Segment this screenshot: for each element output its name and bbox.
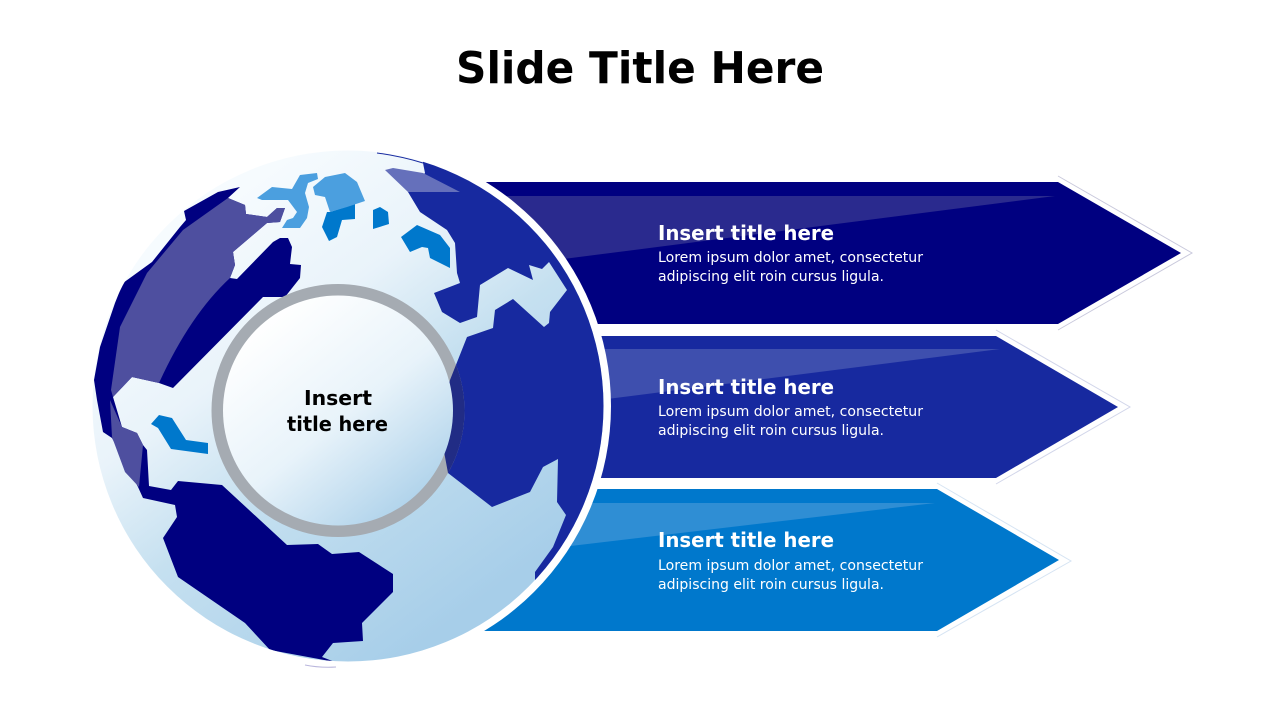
text block 1: Insert title here <box>658 221 834 245</box>
continent: Eurasia and Africa <box>408 162 604 580</box>
island: arctic dark <box>322 204 355 241</box>
highlight: upper continent <box>111 198 285 397</box>
island: north east <box>401 225 450 268</box>
text block 1: Lorem ipsum dolor amet, consectetur <box>658 250 923 266</box>
island: arctic left <box>257 173 318 228</box>
text block 3 <box>658 528 923 593</box>
continent: Americas <box>94 187 393 662</box>
text block 2: adipiscing elit roin cursus ligula. <box>658 423 884 439</box>
text block 3: Lorem ipsum dolor amet, consectetur <box>658 558 923 574</box>
arrow 1: navy <box>400 176 1192 330</box>
title: Slide Title Here <box>456 43 824 94</box>
highlight: north <box>385 168 460 192</box>
text block 2 <box>658 375 923 439</box>
highlight: lower continent <box>110 400 143 487</box>
text block 2: Lorem ipsum dolor amet, consectetur <box>658 404 923 420</box>
top edge line <box>377 153 423 163</box>
island: arctic light <box>313 173 365 212</box>
text block 1 <box>658 221 923 285</box>
center label <box>287 386 388 436</box>
island: caribbean <box>151 415 208 454</box>
arrow 2: royal blue <box>400 330 1130 484</box>
globe white outline <box>85 143 611 669</box>
center label: Insert <box>304 386 372 410</box>
center circle <box>218 290 458 531</box>
bottom edge line <box>305 665 336 667</box>
text block 1: adipiscing elit roin cursus ligula. <box>658 269 884 285</box>
text block 3: adipiscing elit roin cursus ligula. <box>658 577 884 593</box>
island: small north <box>373 207 389 229</box>
text block 3: Insert title here <box>658 528 834 552</box>
center label: title here <box>287 412 388 436</box>
text block 2: Insert title here <box>658 375 834 399</box>
arrow 3: bright blue <box>400 483 1071 637</box>
globe <box>92 150 604 668</box>
